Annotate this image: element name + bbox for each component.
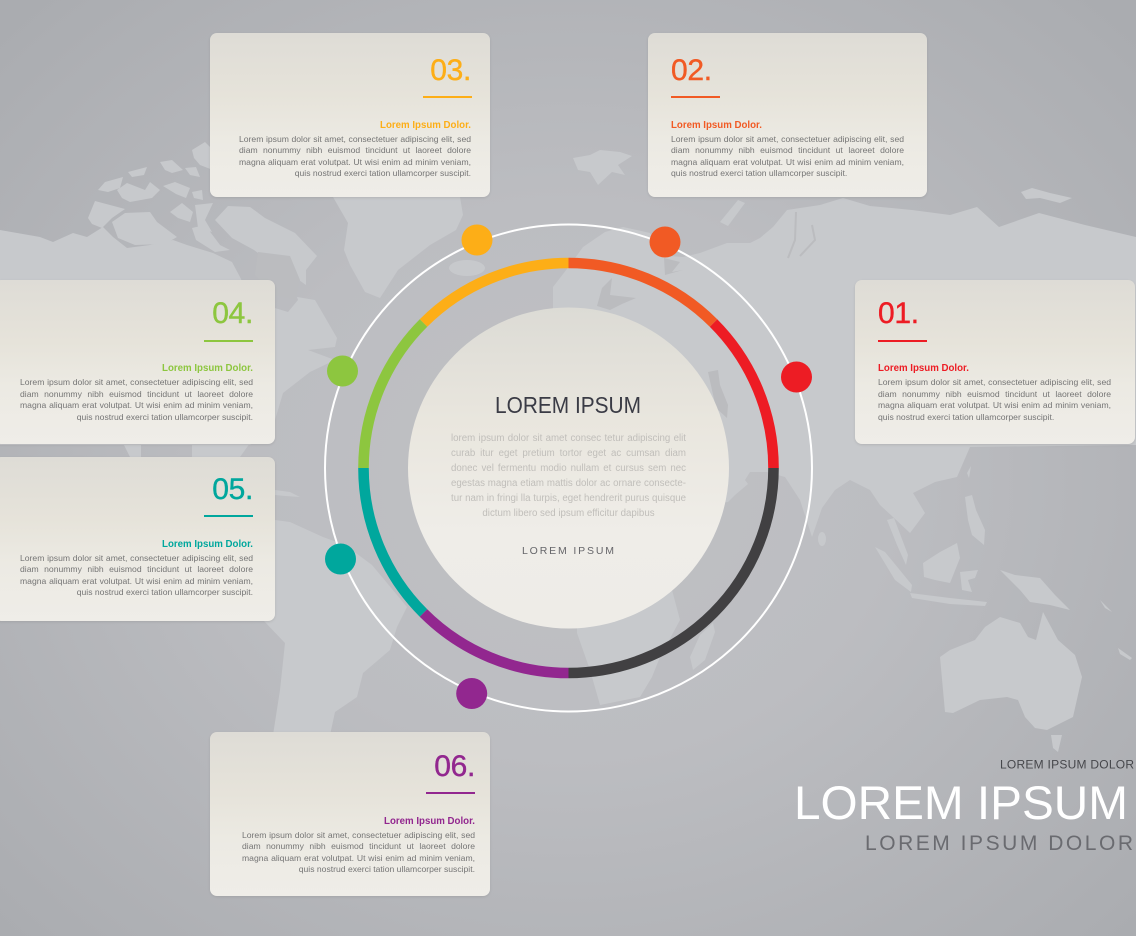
subtitle 03: Lorem Ipsum Dolor.: [380, 120, 471, 130]
rule 06: [426, 792, 475, 794]
map: Madagascar: [690, 623, 715, 670]
dot 06: [456, 678, 487, 709]
map: Caribbean islands: [275, 490, 300, 497]
center body text: egestas magna etiam mattis dolor ac ornare consecte-: [451, 478, 686, 489]
number 04: 04.: [212, 297, 253, 330]
body 05: quis nostrud exerci tation ullamcorper suscipit.: [77, 587, 253, 597]
body 06: diam nonummy nibh euismod tincidunt ut laoreet dolore: [242, 841, 475, 851]
map: Svalbard: [573, 150, 632, 185]
subtitle 01: Lorem Ipsum Dolor.: [878, 363, 969, 374]
body 04: [20, 377, 253, 422]
body 02: diam nonummy nibh euismod tincidunt ut laoreet dolore: [671, 145, 904, 155]
body 01: quis nostrud exerci tation ullamcorper suscipit.: [878, 412, 1054, 422]
subtitle 06: Lorem Ipsum Dolor.: [384, 816, 475, 826]
center title: LOREM IPSUM: [495, 392, 641, 418]
number 01: 01.: [878, 297, 919, 330]
body 03: magna aliquam erat volutpat. Ut wisi enim ad minim veniam,: [239, 157, 471, 167]
body 05: [20, 553, 253, 597]
card 06: [210, 732, 490, 896]
segment 04 green: [364, 323, 424, 468]
body 03: diam nonummy nibh euismod tincidunt ut laoreet dolore: [239, 145, 471, 155]
center body text: lorem ipsum dolor sit amet consec tetur adipiscing elit: [451, 433, 686, 444]
body 04: magna aliquam erat volutpat. Ut wisi enim ad minim veniam,: [20, 400, 253, 410]
body 06: quis nostrud exerci tation ullamcorper suscipit.: [299, 864, 475, 874]
body 05: magna aliquam erat volutpat. Ut wisi enim ad minim veniam,: [20, 576, 253, 586]
rule 03: [422, 96, 472, 98]
segmented ring: [363, 263, 774, 673]
rule 02: [671, 96, 720, 98]
dot 05: [325, 544, 356, 574]
body 06: magna aliquam erat volutpat. Ut wisi enim ad minim veniam,: [242, 853, 475, 863]
map: Malay peninsula: [887, 518, 908, 565]
number 05: 05.: [212, 472, 253, 506]
map: inland seas: [255, 252, 728, 470]
body 03: Lorem ipsum dolor sit amet, consectetuer adipiscing elit, sed: [239, 134, 471, 144]
center caption: LOREM IPSUM: [522, 545, 614, 557]
card 02: [648, 33, 927, 196]
number 02: 02.: [671, 54, 712, 86]
subtitle 05: Lorem Ipsum Dolor.: [162, 538, 253, 550]
center body text: tur nam in fringi lla turpis, eget hendrerit purus quisque: [451, 493, 686, 504]
center body text: [451, 433, 686, 519]
card 03: [210, 33, 490, 196]
center body text: curab itur eget pretium tortor eget ac cumsan diam: [451, 448, 686, 459]
map: Sri Lanka: [818, 532, 826, 546]
center body text: donec vel fermentu modio nullam et cursus sem nec: [451, 463, 686, 474]
map: Novaya Zemlya: [720, 200, 745, 226]
card 04: [0, 280, 275, 444]
dot 04: [327, 356, 358, 386]
map: Greenland: [333, 197, 463, 298]
card 01: [855, 280, 1134, 444]
segment 06 purple: [424, 613, 568, 673]
dot 01: [781, 362, 812, 392]
body 01: Lorem ipsum dolor sit amet, consectetuer adipiscing elit, sed: [878, 377, 1111, 387]
body 02: quis nostrud exerci tation ullamcorper suscipit.: [671, 168, 847, 178]
card 05: [0, 457, 275, 620]
body 05: diam nonummy nibh euismod tincidunt ut laoreet dolore: [20, 564, 253, 574]
rule 04: [204, 340, 253, 342]
map: Eurasia and Africa: [553, 198, 1136, 705]
rule 05: [204, 515, 253, 517]
map: South America: [263, 520, 407, 735]
body 01: [878, 377, 1111, 422]
bottom right overline: LOREM IPSUM DOLOR: [1000, 758, 1134, 772]
outer white ring: [325, 224, 812, 712]
map: North America: [0, 227, 337, 445]
dot 02: [650, 226, 680, 258]
body 02: [671, 134, 904, 178]
rule 01: [878, 340, 927, 342]
map: Arctic islands: [88, 142, 230, 252]
subtitle 04: Lorem Ipsum Dolor.: [162, 363, 253, 374]
bottom right subtitle: LOREM IPSUM DOLOR: [865, 832, 1133, 855]
body 03: [239, 134, 471, 178]
central circle: [408, 308, 729, 628]
map: Australia and Tasmania: [940, 612, 1082, 752]
body 04: diam nonummy nibh euismod tincidunt ut laoreet dolore: [20, 389, 253, 399]
number 03: 03.: [430, 54, 471, 86]
segment 02 orange: [568, 263, 714, 323]
subtitle 02: Lorem Ipsum Dolor.: [671, 120, 762, 130]
segment 03 amber: [424, 263, 568, 323]
map: Iceland: [449, 260, 485, 276]
body 06: Lorem ipsum dolor sit amet, consectetuer adipiscing elit, sed: [242, 830, 475, 840]
body 02: magna aliquam erat volutpat. Ut wisi enim ad minim veniam,: [671, 157, 904, 167]
map: Arctic Russia islands: [1021, 188, 1072, 203]
body 02: Lorem ipsum dolor sit amet, consectetuer adipiscing elit, sed: [671, 134, 904, 144]
body 05: Lorem ipsum dolor sit amet, consectetuer adipiscing elit, sed: [20, 553, 253, 563]
body 01: magna aliquam erat volutpat. Ut wisi enim ad minim veniam,: [878, 400, 1111, 410]
body 04: quis nostrud exerci tation ullamcorper suscipit.: [77, 412, 253, 422]
marker dots: [325, 224, 812, 709]
body 01: diam nonummy nibh euismod tincidunt ut laoreet dolore: [878, 389, 1111, 399]
segment dark: [568, 468, 774, 673]
dot 03: [462, 224, 492, 256]
bottom right title: LOREM IPSUM: [794, 777, 1128, 830]
body 06: [242, 830, 475, 874]
segment 01 red: [714, 323, 774, 468]
map: Baffin Island: [215, 206, 317, 285]
map: Southeast Asian islands: [875, 466, 1132, 660]
body 03: quis nostrud exerci tation ullamcorper suscipit.: [295, 168, 471, 178]
body 04: Lorem ipsum dolor sit amet, consectetuer adipiscing elit, sed: [20, 377, 253, 387]
segment 05 teal: [363, 468, 424, 613]
number 06: 06.: [434, 750, 475, 782]
center body text: dictum libero sed ipsum efficitur dapibus: [482, 508, 655, 519]
map: Central America strip: [123, 443, 250, 457]
